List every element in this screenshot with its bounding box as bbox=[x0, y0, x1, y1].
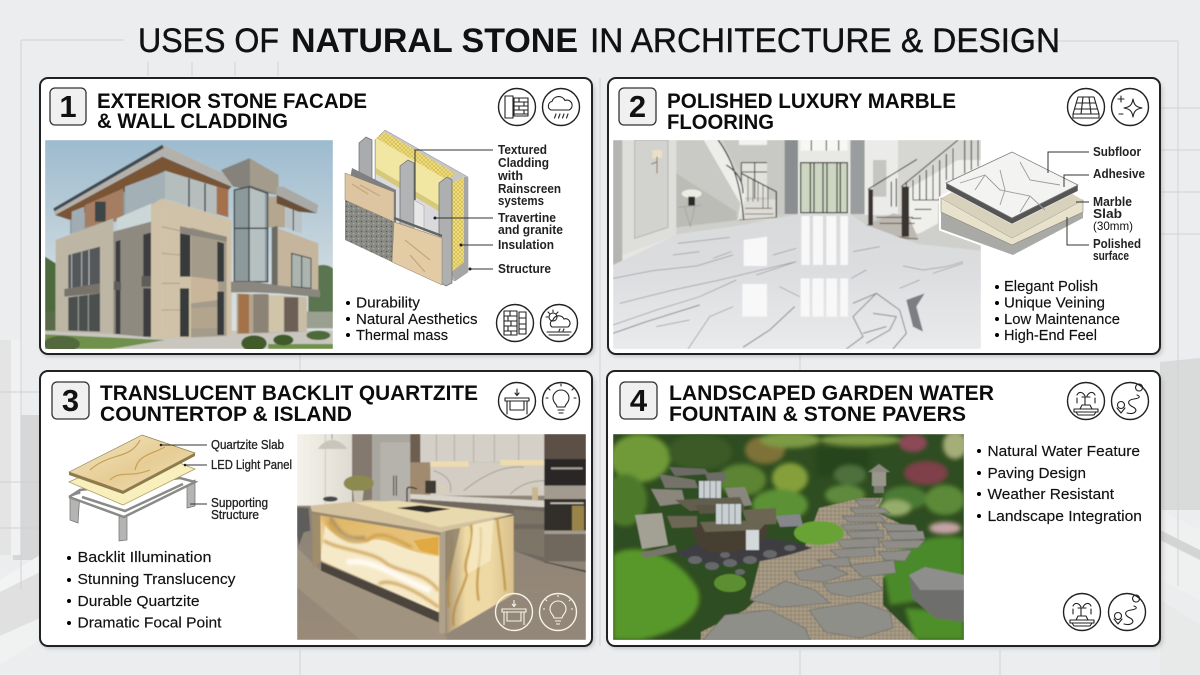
title: USES OF bbox=[138, 22, 279, 60]
cladding labels: Rainscreen bbox=[498, 182, 561, 196]
layer labels: Polished bbox=[1093, 237, 1141, 251]
cladding labels: Textured bbox=[498, 143, 547, 157]
structure labels: Structure bbox=[211, 508, 259, 522]
photo: garden bbox=[613, 434, 964, 640]
structure labels: Supporting bbox=[211, 496, 268, 510]
panel: garden water fountain bbox=[603, 371, 1162, 648]
structure labels: LED Light Panel bbox=[211, 458, 292, 472]
marble layers diagram bbox=[941, 145, 1145, 263]
cladding labels: and granite bbox=[498, 223, 563, 237]
layer labels: (30mm) bbox=[1093, 219, 1133, 233]
bullet list 1: Thermal mass bbox=[356, 327, 448, 344]
title: NATURAL STONE bbox=[291, 22, 578, 60]
cladding labels: Cladding bbox=[498, 156, 549, 170]
cladding labels bbox=[497, 143, 563, 276]
heading 1: EXTERIOR STONE FACADE bbox=[97, 90, 367, 113]
heading 2: POLISHED LUXURY MARBLE bbox=[667, 90, 956, 113]
panel: marble flooring bbox=[608, 78, 1162, 356]
layer labels: surface bbox=[1093, 249, 1129, 263]
heading 3: TRANSLUCENT BACKLIT QUARTZITE bbox=[100, 382, 478, 405]
heading 4: FOUNTAIN & STONE PAVERS bbox=[669, 403, 966, 426]
number badge 4: 4 bbox=[630, 383, 648, 418]
icon: fountain, large bbox=[1064, 594, 1100, 630]
panel: backlit quartzite countertop bbox=[40, 371, 594, 648]
heading 3: COUNTERTOP & ISLAND bbox=[100, 403, 352, 426]
leader lines bbox=[1048, 152, 1089, 245]
icon: stone wall bbox=[496, 304, 534, 342]
bullet list 3 bbox=[67, 549, 236, 632]
layer labels: Adhesive bbox=[1093, 167, 1145, 181]
bullet list 2 bbox=[995, 278, 1120, 344]
structure labels bbox=[211, 438, 292, 522]
heading 3 bbox=[100, 382, 478, 426]
layer labels: Subfloor bbox=[1093, 145, 1141, 159]
photo: kitchen island bbox=[297, 434, 586, 640]
cladding cutaway diagram bbox=[345, 130, 563, 286]
number badge 2 bbox=[619, 88, 656, 125]
icon: route, large bbox=[1108, 594, 1146, 630]
layer labels: Marble bbox=[1093, 195, 1132, 209]
photo: marble foyer bbox=[613, 140, 981, 349]
cladding labels: Insulation bbox=[498, 238, 554, 252]
bullet list 4 bbox=[977, 443, 1142, 525]
icon: wall panel bbox=[498, 88, 536, 126]
number badge 3: 3 bbox=[62, 383, 79, 418]
title bbox=[138, 22, 1060, 60]
cladding labels: with bbox=[497, 169, 523, 183]
icon: light bulb, white bbox=[540, 594, 576, 630]
icon: fountain bbox=[1068, 382, 1104, 420]
heading 2 bbox=[667, 90, 956, 134]
number badge 1 bbox=[50, 88, 86, 125]
number badge 3 bbox=[52, 382, 89, 419]
bullet list 2: High-End Feel bbox=[1004, 327, 1097, 344]
icon: countertop, white bbox=[496, 594, 532, 630]
countertop exploded diagram bbox=[69, 435, 292, 541]
cladding labels: Travertine bbox=[498, 211, 556, 225]
number badge 4 bbox=[620, 382, 657, 419]
icon: route bbox=[1112, 382, 1148, 420]
heading 4: LANDSCAPED GARDEN WATER bbox=[669, 382, 994, 405]
title: IN ARCHITECTURE & DESIGN bbox=[590, 22, 1060, 60]
bullet list 1: Natural Aesthetics bbox=[356, 311, 478, 328]
bullet list 3: Durable Quartzite bbox=[78, 593, 200, 610]
panel: exterior stone facade bbox=[40, 78, 594, 356]
icon: floor tiles bbox=[1068, 88, 1104, 126]
icon: sparkle bbox=[1112, 88, 1148, 126]
bullet list 1: Durability bbox=[356, 294, 420, 312]
heading 4 bbox=[669, 382, 994, 426]
cladding labels: systems bbox=[498, 194, 544, 208]
bullet list 4: Weather Resistant bbox=[988, 486, 1115, 503]
bullet list 2: Low Maintenance bbox=[1004, 311, 1120, 328]
icon: rain cloud bbox=[542, 88, 580, 126]
heading 1: & WALL CLADDING bbox=[97, 110, 288, 133]
bullet list 4: Landscape Integration bbox=[988, 508, 1142, 525]
bullet list 3: Backlit Illumination bbox=[78, 549, 212, 566]
bullet list 2: Elegant Polish bbox=[1004, 278, 1098, 295]
number badge 1: 1 bbox=[59, 89, 77, 124]
layer labels: Slab bbox=[1093, 207, 1122, 221]
icon: weather bbox=[540, 304, 578, 342]
heading 1 bbox=[97, 90, 367, 133]
bullet list 4: Natural Water Feature bbox=[988, 443, 1140, 460]
number badge 2: 2 bbox=[629, 89, 646, 124]
bullet list 3: Dramatic Focal Point bbox=[78, 614, 222, 632]
bullet list 4: Paving Design bbox=[988, 465, 1086, 482]
structure labels: Quartzite Slab bbox=[211, 438, 284, 452]
bullet list 1 bbox=[346, 294, 478, 344]
layer labels bbox=[1093, 145, 1145, 263]
cladding labels: Structure bbox=[498, 262, 551, 276]
bullet list 2: Unique Veining bbox=[1004, 294, 1105, 312]
leader lines bbox=[161, 445, 207, 504]
bullet list 3: Stunning Translucency bbox=[78, 571, 236, 588]
icon: countertop bbox=[498, 382, 536, 420]
heading 2: FLOORING bbox=[667, 111, 774, 134]
photo: stone building bbox=[45, 140, 333, 349]
icon: light bulb bbox=[542, 382, 580, 420]
leader lines bbox=[415, 150, 493, 269]
